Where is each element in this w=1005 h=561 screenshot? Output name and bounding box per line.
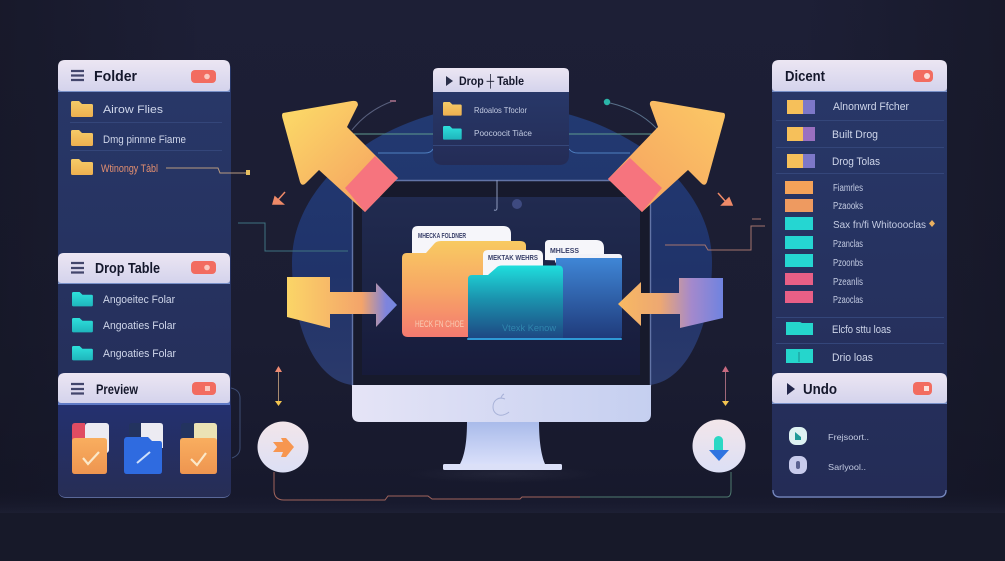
blue folder — [545, 240, 622, 339]
monitor shadow — [408, 465, 598, 483]
panel: left column — [58, 60, 250, 498]
Folder list — [70, 101, 250, 175]
screen dots and drop line — [494, 180, 522, 210]
small file rows — [785, 181, 935, 306]
panel: center Drop Table — [433, 68, 569, 165]
panel: center Drop Table: Drop ┼ Table — [459, 74, 524, 89]
Folder list: Dmg pinnne Fiame — [103, 134, 186, 146]
Folder header: Folder — [94, 68, 137, 85]
Preview header — [58, 373, 230, 405]
teal folder: MEKTAK WEHRS — [488, 255, 538, 262]
Drop Table header: Drop Table — [95, 260, 160, 277]
arrow: side left — [287, 277, 397, 328]
panel: center Drop Table: Poocoocit Tiāce — [474, 128, 532, 138]
Drop Table list: Angoaties Folar — [103, 320, 176, 332]
small file rows: Pzoonbs — [833, 258, 863, 269]
monitor — [352, 180, 651, 470]
Undo header — [772, 373, 947, 404]
preview card: blue — [124, 423, 163, 474]
large file rows — [776, 100, 944, 174]
button: download arrow — [692, 420, 746, 472]
small file rows: Pzanclas — [833, 239, 863, 250]
teal folder rows — [776, 318, 944, 364]
arrow: upper left — [282, 101, 398, 212]
orange folder: MHECKA FOLDNER — [418, 233, 466, 240]
small file rows: Sax fn/fi Whitoooclas — [833, 220, 926, 231]
Dicent header — [772, 60, 947, 92]
small file rows: Pzaoclas — [833, 295, 863, 306]
panel: center Drop Table: Rdoalos Tfoclor — [474, 105, 527, 115]
small file rows: Pzeanlis — [833, 277, 863, 288]
teal folder rows: Drio loas — [832, 352, 873, 364]
Undo list: Sarlyool.. — [828, 462, 866, 472]
button: orange arrow — [258, 422, 308, 472]
Preview header: Preview — [96, 382, 138, 397]
connector lines — [231, 101, 765, 500]
double arrow: left — [275, 366, 282, 406]
connector end dots — [390, 99, 610, 105]
arrow: upper right — [608, 101, 725, 212]
Folder list: Airow Flies — [103, 104, 164, 116]
small arrow: right — [718, 193, 732, 205]
small arrow: left — [273, 192, 285, 204]
Folder header — [58, 60, 230, 92]
orange folder — [402, 226, 526, 337]
teal folder rows: Elcfo sttu loas — [832, 324, 891, 336]
Folder list: Wtinongy Tàbl — [101, 163, 158, 175]
large file rows: Alnonwrd Ffcher — [833, 101, 909, 113]
orange folder: HECK FN CHOE — [415, 319, 464, 329]
Drop Table list — [72, 292, 176, 360]
Drop Table list: Angoaties Folar — [103, 348, 176, 360]
Preview body — [58, 400, 231, 497]
Undo list — [789, 427, 869, 474]
Drop Table header — [58, 253, 230, 284]
folder stack — [402, 226, 622, 340]
large file rows: Drog Tolas — [832, 156, 880, 168]
teal folder: Vtexk Kenow — [502, 323, 557, 333]
preview card: amber — [180, 423, 217, 474]
arrow: side right — [618, 278, 723, 328]
small file rows: Pzaooks — [833, 201, 863, 212]
teal folder — [467, 250, 622, 340]
Dicent header: Dicent — [785, 68, 825, 85]
Undo header: Undo — [803, 381, 837, 398]
dome backdrop — [292, 105, 712, 385]
small file rows: Fiamrles — [833, 183, 863, 194]
Drop Table list: Angoeitec Folar — [103, 294, 175, 306]
panel: right column — [772, 60, 947, 498]
double arrow: right — [722, 366, 729, 406]
preview card: orange — [72, 423, 109, 474]
Undo list: Frejsoort.. — [828, 432, 869, 442]
blue folder: MHLESS — [550, 246, 579, 255]
large file rows: Built Drog — [832, 129, 878, 141]
monitor logo — [493, 394, 509, 415]
